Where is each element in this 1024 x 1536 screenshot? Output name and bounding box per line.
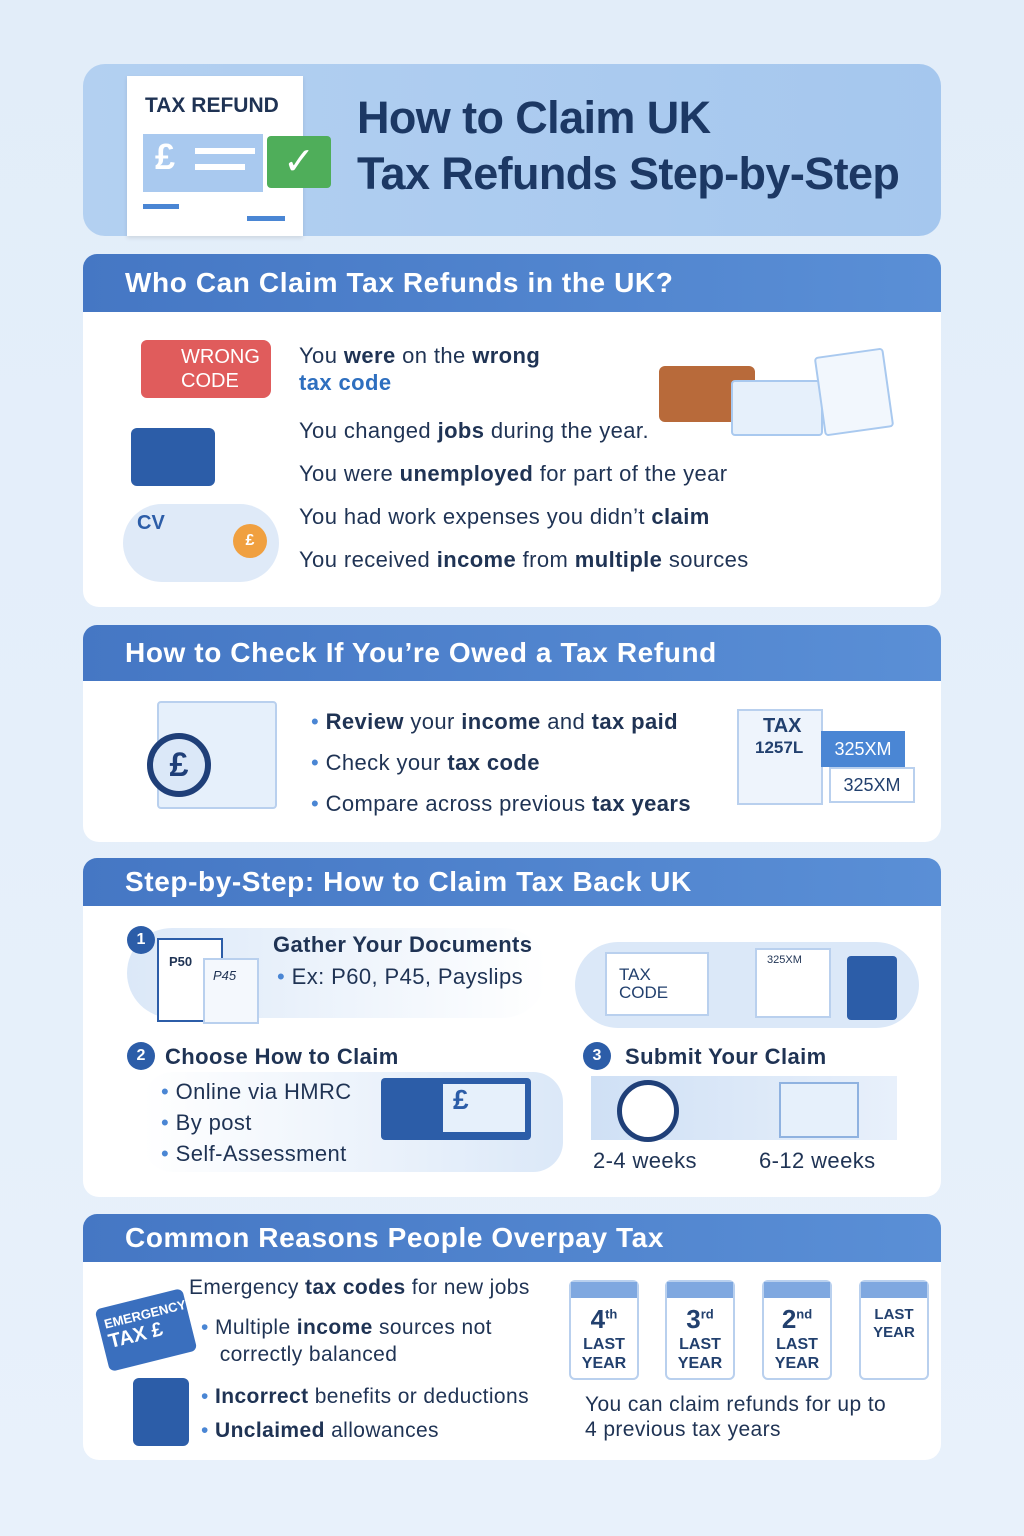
- step 3: submit claim: 3: [593, 1047, 601, 1064]
- illustration: tax code and calculator: 325XM: [767, 954, 802, 966]
- header panel: [83, 64, 941, 236]
- section heading: common reasons: Common Reasons People Overpay Tax: [125, 1222, 664, 1253]
- icon: emergency tax tag: EMERGENCY: [103, 1297, 188, 1332]
- icon: tax code documents: [737, 709, 915, 805]
- calendars: tax years: YEAR: [582, 1355, 626, 1372]
- text: claim up to 4 years: You can claim refunds for up to: [585, 1393, 886, 1416]
- panel: common reasons: • Multiple income sources not: [201, 1316, 492, 1339]
- list: check steps: [311, 709, 691, 816]
- icon: magnifier over document: £: [170, 746, 188, 784]
- icon: CV and documents: CV: [137, 512, 165, 534]
- calendars: tax years: LAST: [583, 1336, 625, 1353]
- icon: tax refund document: £: [155, 136, 175, 177]
- calendars: tax years: YEAR: [873, 1324, 915, 1341]
- icon: magnifier over document: [147, 701, 277, 809]
- step 1: gather documents: • Ex: P60, P45, Payslips: [277, 964, 523, 989]
- icon: tax refund document: ✓: [283, 141, 315, 183]
- text: claim up to 4 years: [585, 1393, 886, 1441]
- list: overpay reasons: Emergency tax codes for new jobs: [189, 1276, 530, 1299]
- panel: common reasons: • Incorrect benefits or deductions: [201, 1385, 529, 1408]
- icon: tax code documents: 325XM: [843, 775, 901, 795]
- icon: wrong code tag: [141, 340, 271, 398]
- panel: check: [83, 681, 941, 842]
- title: [357, 92, 899, 199]
- icon: tax code documents: TAX: [763, 715, 802, 737]
- icon: calculator: [133, 1378, 189, 1446]
- panel: who can claim: [83, 312, 941, 607]
- calendars: tax years: 2nd: [782, 1304, 812, 1334]
- step 1: gather documents: P50: [169, 954, 192, 969]
- step 1: gather documents: 1: [137, 931, 145, 948]
- text: wrong code: [299, 343, 540, 395]
- list: check steps: • Check your tax code: [311, 750, 540, 775]
- icon: briefcase and documents: [659, 348, 894, 436]
- step 2: choose how to claim: 2: [137, 1047, 145, 1064]
- step 3: submit claim: Submit Your Claim: [625, 1044, 827, 1069]
- text: wrong code: tax code: [299, 370, 391, 395]
- text: changed jobs: You changed jobs during the year.: [299, 418, 649, 443]
- step 2: choose how to claim: £: [453, 1084, 469, 1115]
- text: wrong code: You were on the wrong: [299, 343, 540, 368]
- step 2: choose how to claim: [127, 1042, 563, 1172]
- icon: CV and documents: [123, 504, 279, 582]
- step 3: submit claim: 2-4 weeks: [593, 1148, 697, 1173]
- calendars: tax years: LAST: [874, 1306, 914, 1323]
- icon: emergency tax tag: TAX £: [106, 1318, 165, 1353]
- section heading: who can claim: [83, 254, 941, 312]
- calendars: tax years: 3rd: [686, 1304, 714, 1334]
- panel: common reasons: correctly balanced: [220, 1343, 397, 1366]
- panel: step-by-step: [83, 906, 941, 1197]
- list: check steps: • Review your income and tax paid: [311, 709, 678, 734]
- icon: CV and documents: £: [246, 532, 254, 549]
- section heading: check: [83, 625, 941, 681]
- calendars: tax years: YEAR: [775, 1355, 819, 1372]
- step 1: gather documents: [127, 926, 532, 1024]
- icon: tax refund document: [127, 76, 303, 236]
- icon: wrong code tag: CODE: [181, 370, 239, 392]
- calendars: tax years: YEAR: [678, 1355, 722, 1372]
- calendars: tax years: LAST: [776, 1336, 818, 1353]
- icon: blue briefcase: [131, 428, 215, 486]
- title: Tax Refunds Step-by-Step: [357, 148, 899, 199]
- step 2: choose how to claim: Choose How to Claim: [165, 1044, 399, 1069]
- icon: tax code documents: 1257L: [755, 738, 803, 757]
- step 2: choose how to claim: • Self-Assessment: [161, 1141, 347, 1166]
- icon: emergency tax tag: [95, 1288, 197, 1372]
- icon: tax code documents: 325XM: [834, 739, 892, 759]
- step 2: choose how to claim: • By post: [161, 1110, 252, 1135]
- step 1: gather documents: P45: [213, 968, 236, 983]
- step 3: submit claim: 6-12 weeks: [759, 1148, 876, 1173]
- text: unemployed: You were unemployed for part of the year: [299, 461, 728, 486]
- calendars: tax years: 4th: [591, 1304, 617, 1334]
- step 3: submit claim: [583, 1042, 897, 1173]
- section heading: common reasons: [83, 1214, 941, 1262]
- step 2: choose how to claim: • Online via HMRC: [161, 1079, 352, 1104]
- title: How to Claim UK: [357, 92, 711, 143]
- text: work expenses: You had work expenses you didn’t claim: [299, 504, 710, 529]
- icon: tax refund document: TAX REFUND: [145, 94, 279, 117]
- step 1: gather documents: Gather Your Documents: [273, 932, 532, 957]
- section heading: step-by-step: Step-by-Step: How to Claim Tax Back UK: [125, 866, 692, 897]
- calendars: tax years: [569, 1280, 929, 1380]
- illustration: tax code and calculator: [575, 942, 919, 1028]
- icon: wrong code tag: WRONG: [181, 346, 260, 368]
- calendars: tax years: LAST: [679, 1336, 721, 1353]
- text: multiple sources: You received income from multiple sources: [299, 547, 749, 572]
- panel: common reasons: [83, 1262, 941, 1460]
- illustration: tax code and calculator: CODE: [619, 983, 668, 1002]
- list: check steps: • Compare across previous tax years: [311, 791, 691, 816]
- text: claim up to 4 years: 4 previous tax years: [585, 1418, 781, 1441]
- section heading: check: How to Check If You’re Owed a Tax Refund: [125, 637, 717, 668]
- illustration: tax code and calculator: TAX: [619, 965, 651, 984]
- panel: common reasons: • Unclaimed allowances: [201, 1419, 439, 1442]
- section heading: step-by-step: [83, 858, 941, 906]
- section heading: who can claim: Who Can Claim Tax Refunds in the UK?: [125, 267, 673, 298]
